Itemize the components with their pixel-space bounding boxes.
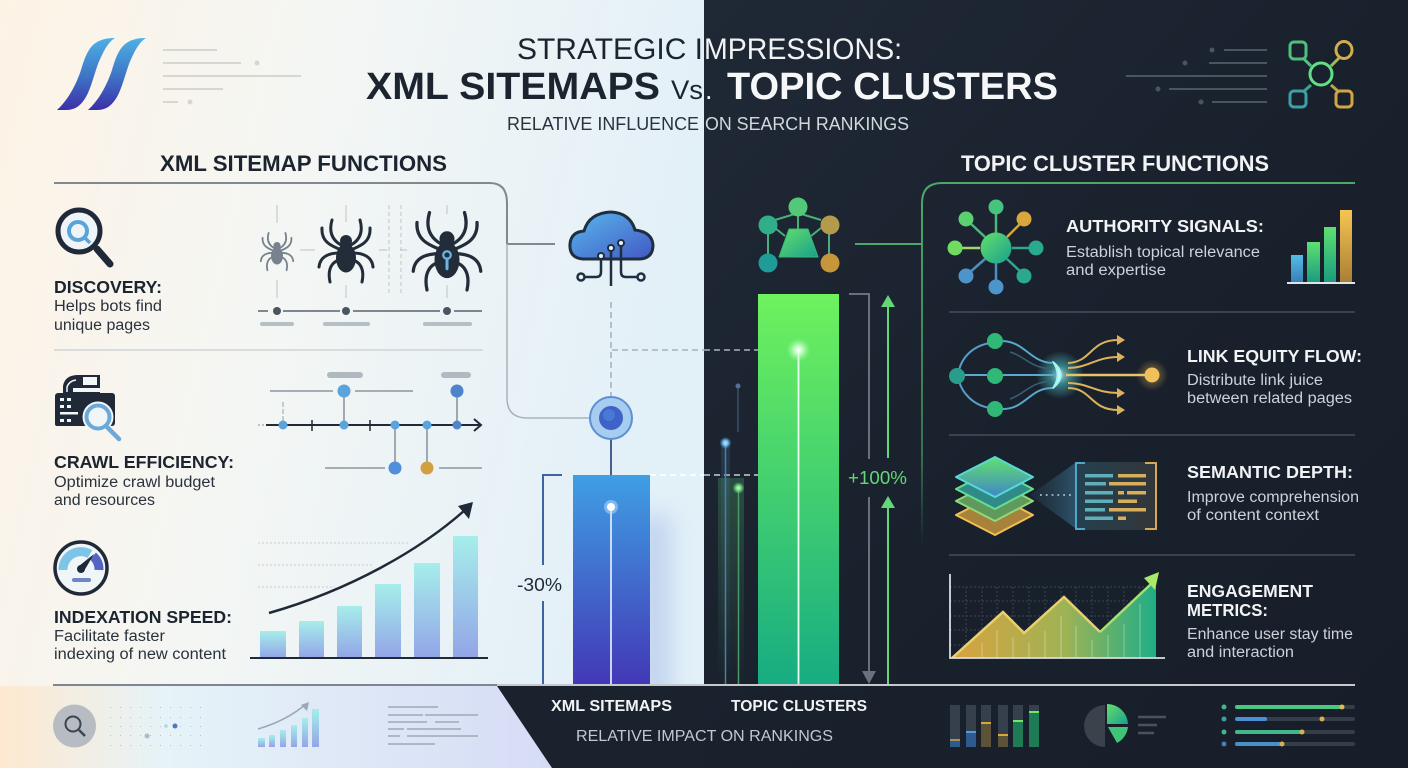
footer progress bars [1222,704,1355,746]
footer stacked bars [950,705,1039,747]
background: light left half [0,0,704,768]
heading: XML sitemap functions: XML SITEMAP FUNCTIONS [160,151,447,176]
link equity flow text: between related pages [1187,390,1352,407]
heading: topic cluster functions: TOPIC CLUSTER FUNCTIONS [961,151,1269,176]
footer labels: XML SITEMAPS [551,698,672,715]
footer pie chart [1084,704,1166,747]
node above blue bar [590,397,632,475]
title: XML SITEMAPS [366,66,660,108]
discovery text: Helps bots find [54,298,162,315]
authority mini bar chart [1287,210,1355,283]
footer dot grid [110,707,201,746]
semantic depth text: Improve comprehension [1187,489,1359,506]
title: STRATEGIC I [517,33,703,66]
discovery text [54,277,162,334]
footer band: dark centre [497,686,704,768]
footer mini chart [258,702,319,747]
engagement metrics text: Enhance user stay time [1187,626,1353,643]
link equity flow text [1187,346,1362,407]
link equity flow text: LINK EQUITY FLOW: [1187,346,1362,366]
footer rule [53,684,497,686]
crawl efficiency text: Optimize crawl budget [54,474,216,491]
link equity flow text: Distribute link juice [1187,372,1323,389]
bar chart: indexation growth [250,502,488,658]
bar: XML sitemaps [573,475,650,684]
header decoration right [1126,48,1267,104]
discovery text: unique pages [54,317,150,334]
header decoration left [163,50,301,104]
indexation speed text: Facilitate faster [54,628,165,645]
authority signals text: AUTHORITY SIGNALS: [1066,216,1264,236]
footer text lines [388,706,478,745]
title: . [705,75,713,105]
indexation speed icon: gauge [55,542,107,594]
crawl timeline [258,372,482,474]
engagement metrics text [1187,581,1353,661]
crawl efficiency text: and resources [54,492,155,509]
authority signals text: Establish topical relevance [1066,244,1260,261]
indexation speed text: INDEXATION SPEED: [54,607,232,627]
crawl efficiency text: CRAWL EFFICIENCY: [54,452,234,472]
crawl efficiency icon: fax with magnifier [55,375,119,439]
icon: semantic layers and document [956,457,1157,535]
spider threads and connectors [277,205,447,298]
bracket: minus 30 percent [543,475,562,684]
panel frame: XML sitemap functions [54,183,590,418]
title: ON SEARCH RANKINGS [705,114,909,134]
background: dark right half [704,0,1408,768]
semantic depth text [1187,462,1359,524]
icon: medium spider [319,220,373,282]
background glow columns [718,384,744,684]
title: Vs [671,75,703,105]
icon: link equity flow [949,333,1168,417]
dashed connector: sitemap node to green bar [611,302,795,396]
panel frame: topic cluster functions [855,183,1355,545]
footer labels: TOPIC CLUSTERS [731,698,867,715]
authority signals text: and expertise [1066,262,1166,279]
icon: cloud with circuit [570,212,653,286]
icon: cluster network above green bar [758,198,840,272]
label: +100%: +100% [848,468,907,488]
label: -30%: -30% [517,575,562,595]
authority signals text [1066,216,1264,279]
footer labels: RELATIVE IMPACT ON RANKINGS [576,728,833,745]
bracket arrow: gray [849,294,876,684]
title: TOPIC CLUSTERS [727,66,1058,108]
discovery text: DISCOVERY: [54,277,162,297]
spider timeline [258,307,482,326]
icon: large spider with keyhole [413,212,481,290]
arrow: green up [881,295,895,684]
semantic depth text: SEMANTIC DEPTH: [1187,462,1353,482]
title [366,33,1058,134]
icon: network top right [1290,42,1352,107]
shadow beside blue bar [650,509,678,684]
discovery icon: magnifier [58,210,110,264]
indexation speed text [54,607,232,663]
footer icon: search circle [53,704,96,748]
icon: authority hub [948,200,1044,294]
footer band: light left [0,686,552,768]
bar: topic clusters [758,294,839,684]
crawl efficiency text [54,452,234,509]
semantic depth text: of content context [1187,507,1320,524]
title: MPRESSIONS: [704,33,902,66]
footer labels [551,698,867,745]
engagement metrics text: METRICS: [1187,600,1268,620]
dashed connector: blue bar to green bar [650,474,758,476]
indexation speed text: indexing of new content [54,646,227,663]
engagement metrics text: ENGAGEMENT [1187,581,1313,601]
logo [57,38,146,110]
engagement metrics text: and interaction [1187,644,1294,661]
icon: small spider [261,233,293,270]
area chart: engagement metrics [950,572,1165,658]
title: RELATIVE INFLUENCE [507,114,699,134]
